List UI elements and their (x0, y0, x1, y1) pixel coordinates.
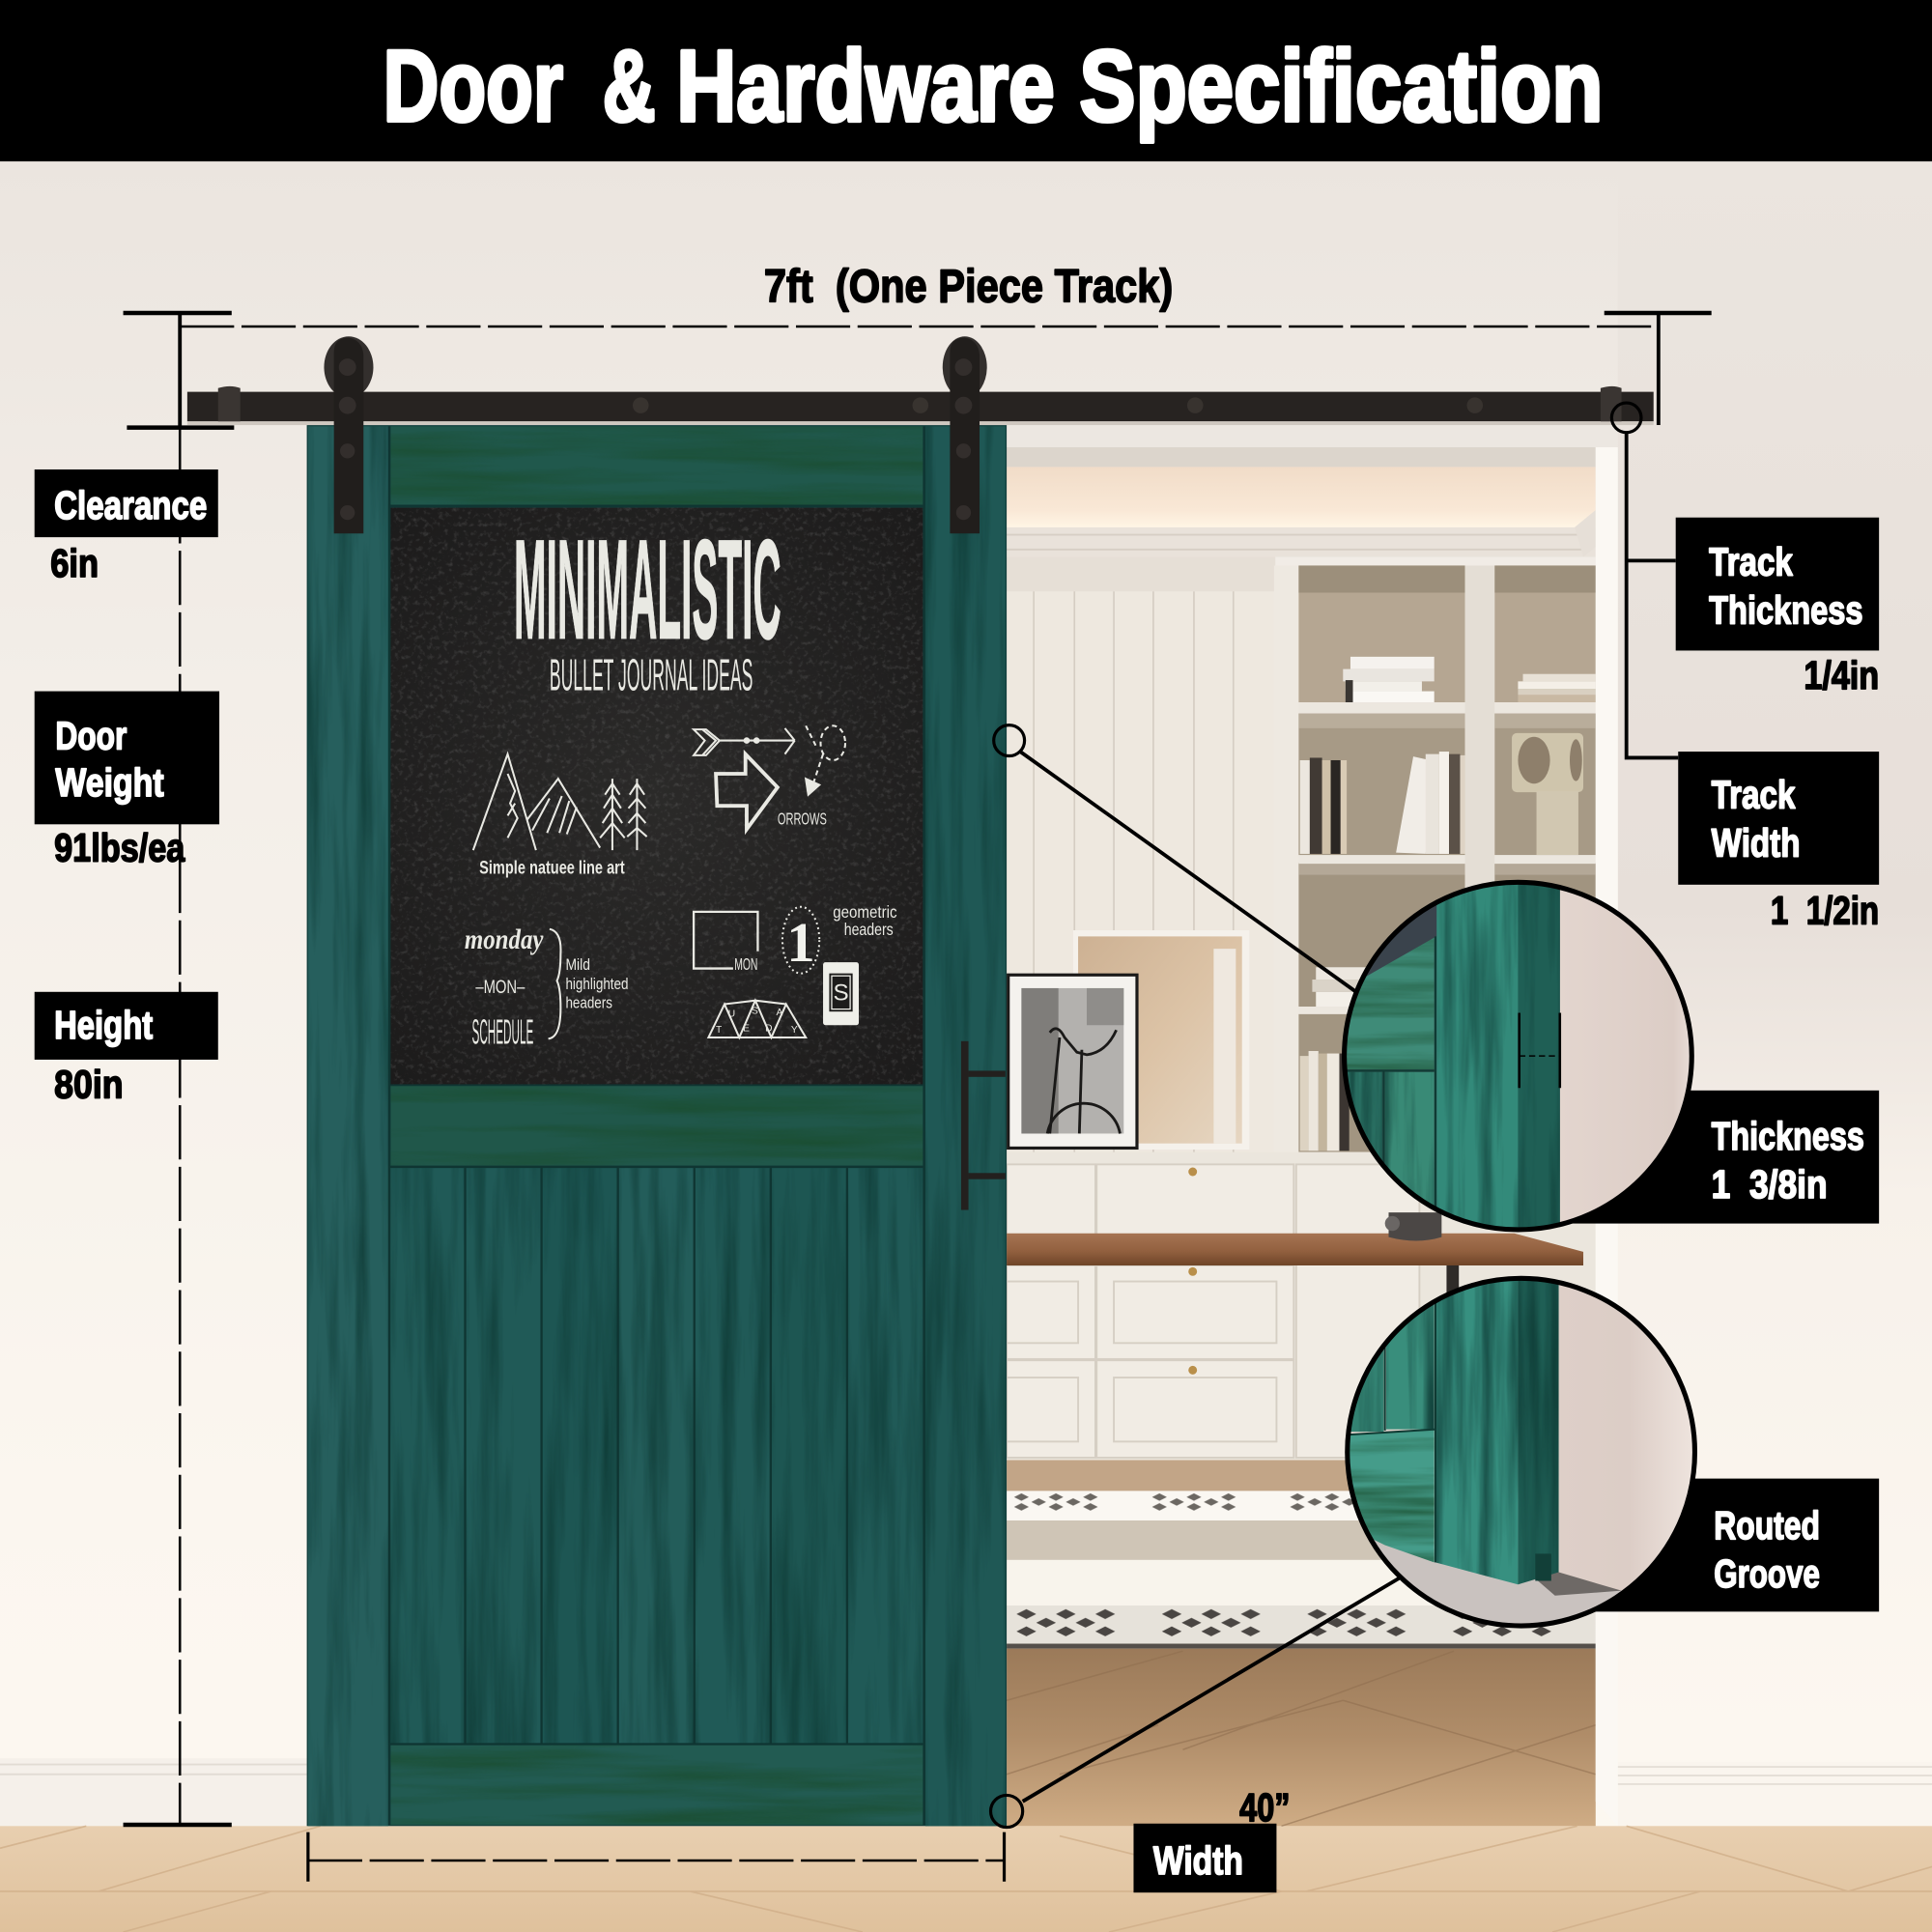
chalk headers list: –MON– (475, 978, 526, 998)
door jamb (1596, 447, 1618, 1826)
callout: track width: Width (1712, 820, 1801, 865)
left end stop (218, 386, 241, 421)
arrows (694, 725, 845, 829)
chalk headers list: monday (465, 924, 544, 955)
doorway interior (1007, 425, 1618, 1826)
callout: door weight: Door (55, 714, 127, 758)
chalk label: arrows: ORROWS (778, 809, 827, 828)
beige art print (1073, 930, 1249, 1150)
callout: door weight: Weight (55, 760, 164, 805)
callout: clearance (35, 469, 218, 585)
chalk label: nature: Simple natuee line art (479, 858, 625, 878)
books top shelf (1343, 657, 1435, 702)
chalk headers list: Mild (565, 955, 590, 974)
crown molding (1007, 510, 1596, 557)
routed groove notch (1535, 1553, 1551, 1580)
title: Hardware (676, 30, 1055, 143)
chalk headers list: SCHEDULE (472, 1012, 533, 1051)
callout: track thickness: Thickness (1709, 587, 1863, 632)
geometric headers: Y (791, 1025, 798, 1036)
books fourth shelf (1300, 1051, 1350, 1151)
callout: routed groove: Routed (1714, 1503, 1820, 1548)
callout: track width: 1 1/2in (1771, 889, 1879, 933)
geometric headers: D (765, 1024, 772, 1035)
callout: width (1133, 1785, 1290, 1892)
chalkboard: BULLET JOURNAL IDEAS (550, 649, 753, 699)
right hanger (943, 336, 987, 533)
left stile (308, 426, 388, 1826)
callout: routed groove: Groove (1714, 1551, 1820, 1596)
geometric headers: MON (734, 954, 757, 974)
ceiling cove light (1007, 467, 1596, 528)
door (307, 425, 1007, 1826)
title (384, 30, 1603, 143)
geometric headers: geometric (833, 902, 897, 922)
door width dimension (308, 1833, 1005, 1882)
table with mug (1007, 1212, 1583, 1296)
left hanger (324, 336, 373, 533)
track length label: 7ft (One Piece Track) (764, 260, 1173, 312)
right stile (925, 426, 1006, 1826)
callout: track thickness: 1/4in (1804, 653, 1879, 697)
callout: height (35, 992, 218, 1106)
geometric headers: E (743, 1024, 750, 1035)
geometric headers: T (716, 1025, 722, 1036)
title bar (0, 0, 1932, 161)
callout: clearance: Clearance (54, 483, 207, 527)
chalk headers list: headers (565, 993, 612, 1011)
door handle (961, 1041, 1006, 1210)
cabinets (1007, 1152, 1596, 1463)
geometric headers: S (833, 980, 849, 1007)
height dimension (124, 428, 232, 1825)
mountains and trees (473, 754, 647, 850)
geometric headers: headers (844, 920, 894, 939)
books second shelf (1300, 752, 1484, 854)
right end stop (1601, 386, 1622, 421)
callout: width: 40” (1239, 1785, 1290, 1830)
sculpture (1512, 733, 1583, 855)
dimension lines (124, 313, 1712, 1882)
black and white bicycle photo (1007, 974, 1139, 1150)
geometric headers: 1 (786, 911, 815, 974)
books right shelf (1518, 674, 1596, 702)
bottom rail (390, 1745, 923, 1825)
books third shelf (1312, 967, 1368, 1007)
callout: door weight: 91lbs/ea (54, 826, 185, 870)
door: MINIMALISTIC (514, 511, 781, 669)
callout: track width (1678, 752, 1879, 933)
callout: width: Width (1153, 1838, 1243, 1883)
geometric headers (694, 902, 897, 1037)
vertical planks (389, 1168, 923, 1744)
callout: track thickness: Track (1709, 540, 1793, 584)
chalk headers list (465, 924, 629, 1051)
magnifier: routed groove (1337, 1269, 1700, 1632)
title: Door (384, 30, 563, 143)
middle rail (390, 1086, 923, 1166)
track callout lines (1611, 403, 1678, 757)
geometric headers: A (777, 1008, 783, 1018)
built-in shelves (1274, 565, 1596, 1153)
callout: height: Height (54, 1003, 153, 1047)
callout: clearance: 6in (50, 541, 99, 585)
title: Specification (1079, 30, 1603, 143)
callout: track thickness (1676, 518, 1879, 697)
plank seams (389, 426, 924, 1825)
chalk headers list: highlighted (565, 975, 629, 993)
panelled wall (1007, 557, 1275, 1153)
callout: door thickness (1528, 1091, 1879, 1224)
groove pointer (991, 1577, 1401, 1828)
chalkboard (390, 508, 923, 1084)
thickness marker (1520, 1012, 1560, 1088)
clearance bar (127, 426, 234, 429)
geometric headers: U (728, 1009, 735, 1019)
callout: height: 80in (54, 1062, 124, 1106)
magnifier: door thickness (1337, 875, 1707, 1238)
thickness pointer (994, 725, 1358, 993)
sliding track (187, 386, 1654, 425)
callout: track width: Track (1712, 773, 1796, 817)
title: & (603, 30, 656, 143)
room floor and rug (1007, 1460, 1596, 1826)
callout: door thickness: Thickness (1712, 1114, 1864, 1158)
track length dimension (124, 313, 1712, 428)
callout: routed groove (1528, 1479, 1879, 1611)
top rail (390, 426, 923, 505)
callout: door weight (35, 692, 219, 870)
callout: door thickness: 1 3/8in (1712, 1162, 1828, 1207)
geometric headers: S (752, 1007, 758, 1017)
